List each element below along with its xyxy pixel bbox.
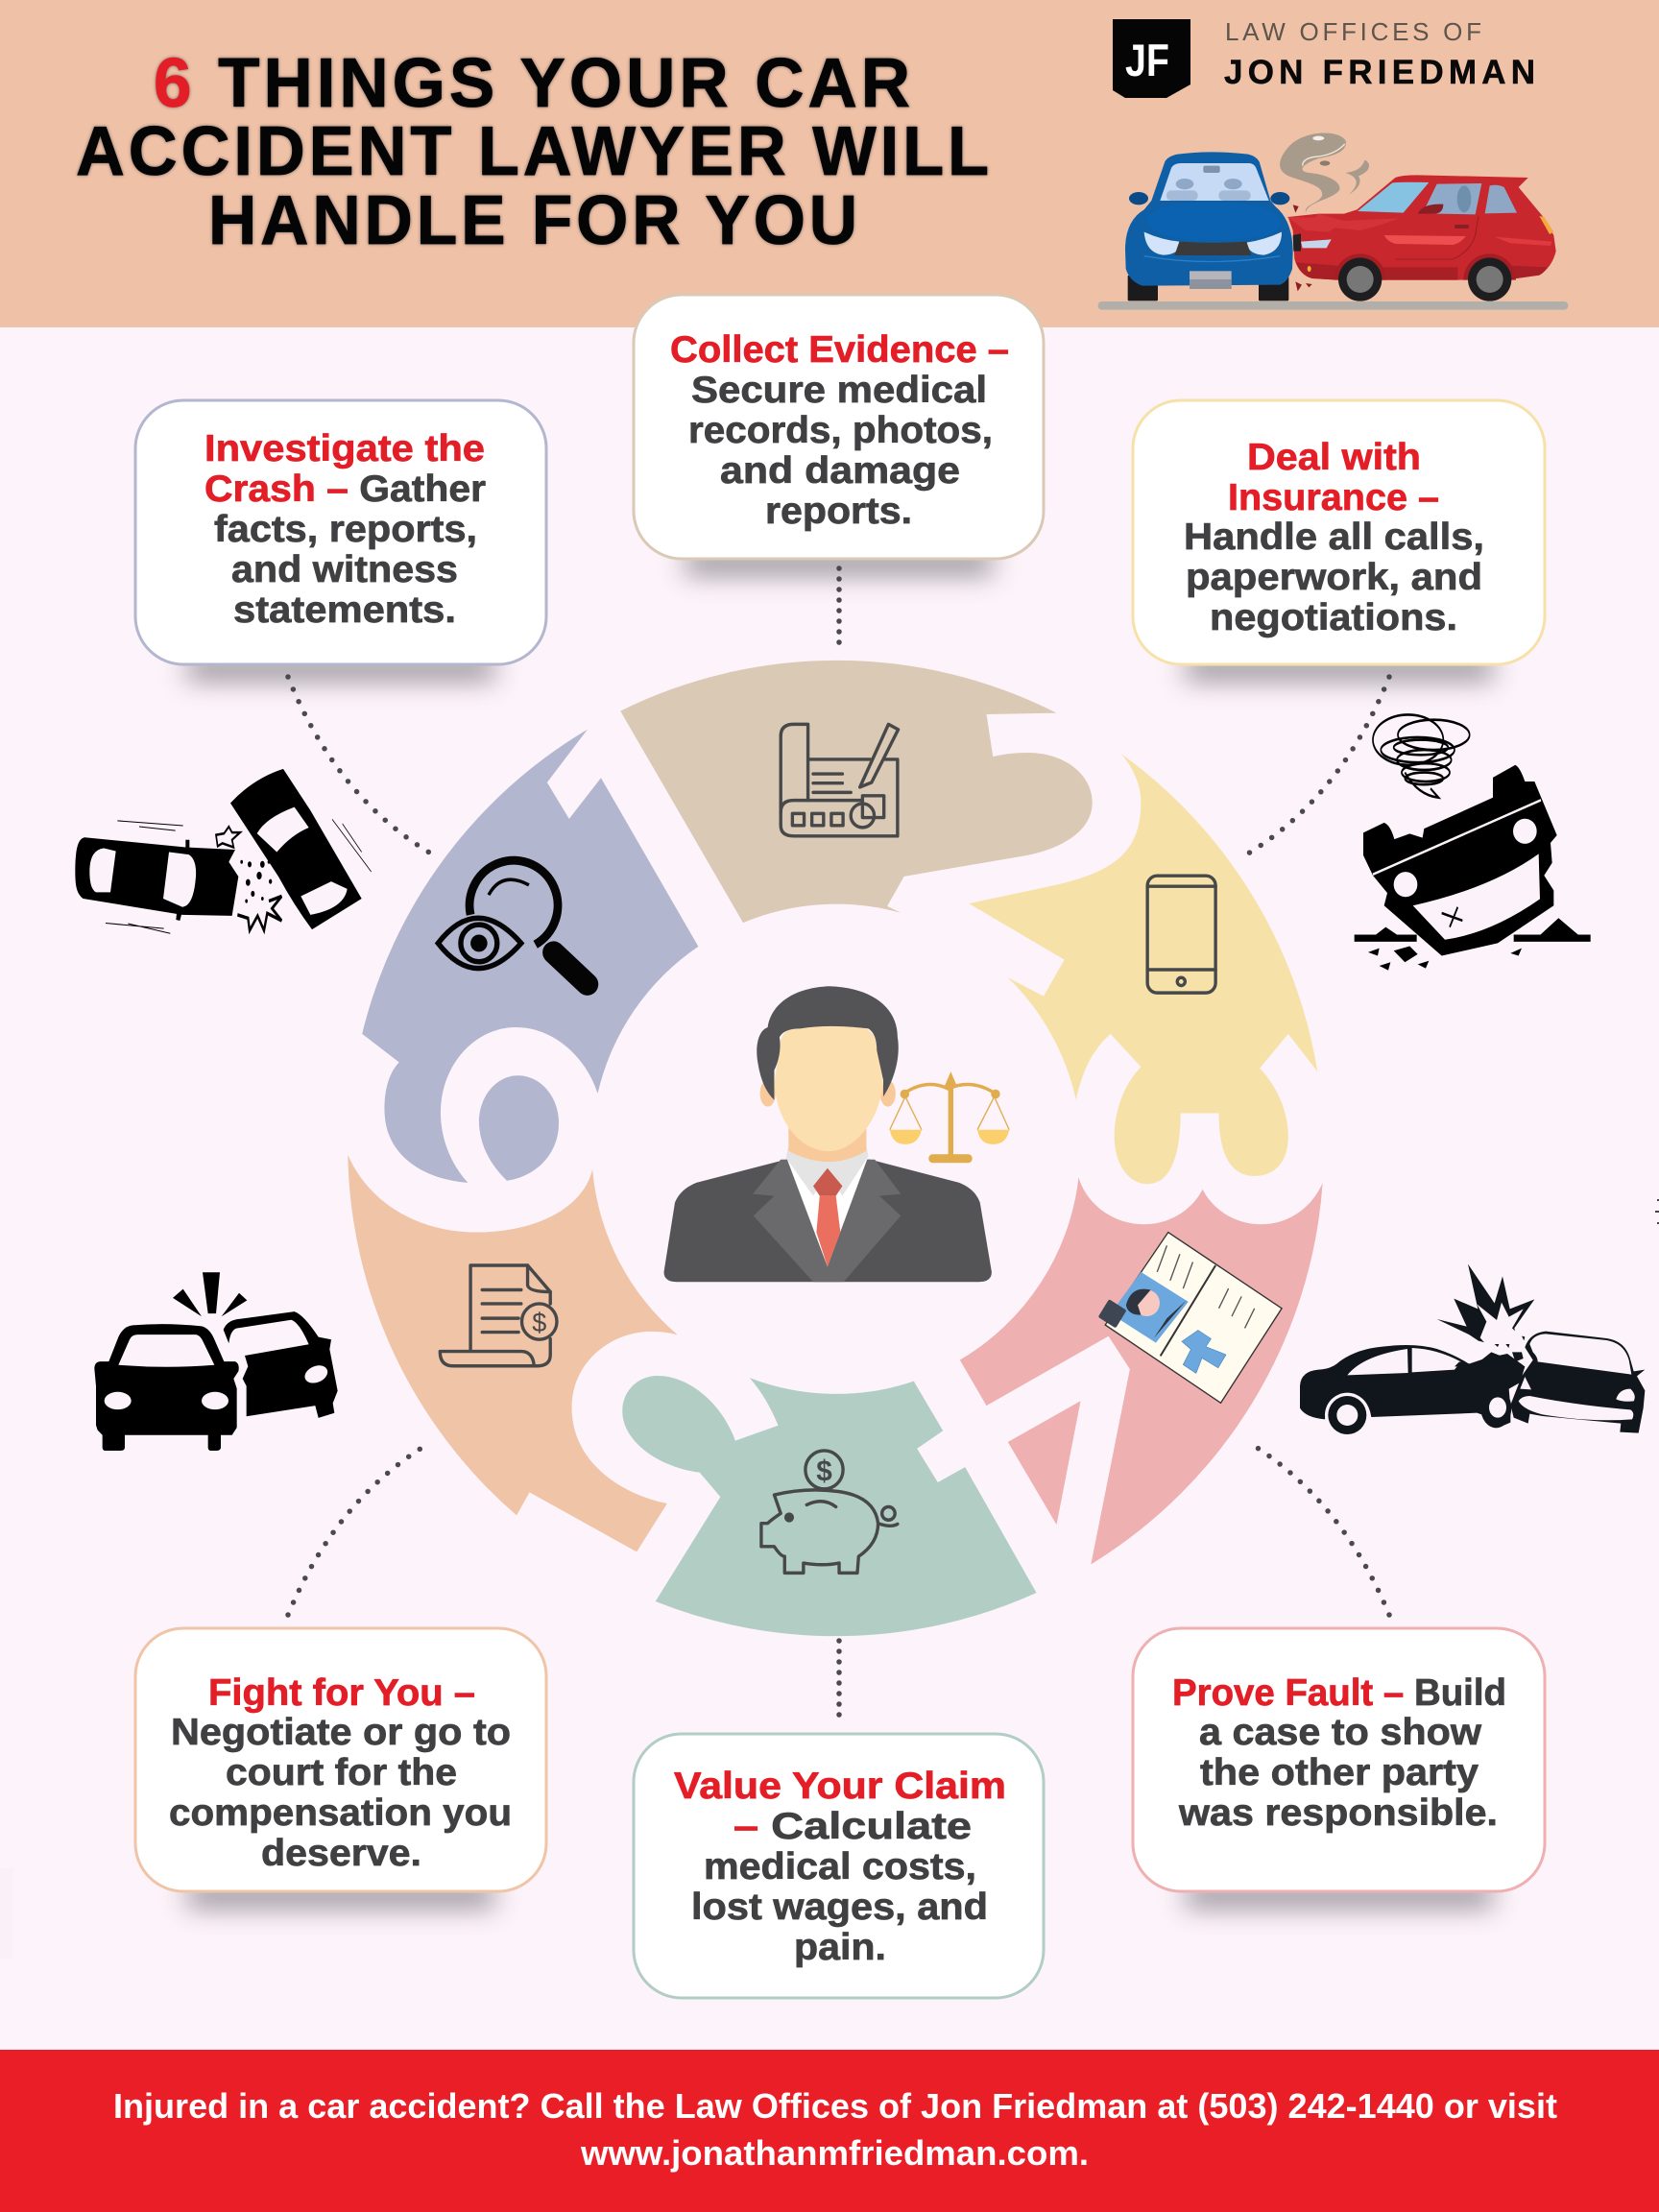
segment: value your claim [622,1376,1037,1636]
icon: scales of justice [890,1071,1009,1163]
card text: Investigate the [204,428,485,469]
card text: deserve. [261,1833,421,1874]
central lawyer figure [664,986,1009,1282]
smoke [1280,132,1369,213]
red car [1287,175,1556,301]
card text: records, photos, [688,410,993,451]
card text [1172,1672,1506,1834]
card text: reports. [765,491,912,532]
burst [1437,1264,1534,1354]
icon: bill document [440,1265,557,1366]
title: 6 THINGS YOUR CAR [154,45,914,122]
icon: medical card [1098,1233,1282,1403]
card text: compensation you [169,1792,512,1834]
illustration: two cars bumping [94,1272,338,1451]
card text: Prove Fault – Build [1172,1672,1506,1714]
card text: the other party [1200,1752,1479,1793]
card: prove fault [1133,1628,1545,1907]
card text: was responsible. [1178,1792,1498,1834]
card text: Crash – Gather [204,469,486,510]
connector: investigate [288,677,431,854]
card: value your claim [634,1734,1044,1998]
segment: investigate the crash [362,730,698,1183]
icon: piggy bank: $ [816,1455,832,1487]
illustration: overturned car [1355,714,1591,971]
logo text: law offices of: LAW OFFICES OF [1225,17,1481,46]
card: deal with insurance [1133,400,1545,680]
card: investigate the crash [135,400,546,680]
panel: wheel of six segments [348,661,1323,1636]
card text: – Calculate [733,1806,972,1847]
header band [0,0,1659,327]
card text: Secure medical [691,370,987,411]
sedan [1300,1336,1525,1437]
card text [674,1766,1006,1968]
card text [204,428,486,631]
icon: JF shield: JF [1125,35,1169,85]
card: collect evidence [634,295,1044,574]
front car [1510,1332,1645,1433]
card text: Insurance – [1228,477,1439,518]
segment: prove fault [960,1177,1323,1564]
card text [670,329,1009,532]
logo text: Jon Friedman: JON FRIEDMAN [1224,54,1535,91]
connector: deal with insurance [1248,677,1389,854]
card text: lost wages, and [691,1887,988,1928]
card text: and damage [720,450,960,492]
card text [1184,437,1484,638]
segment: fight for you [348,1155,678,1551]
title: ACCIDENT LAWYER WILL [76,113,993,190]
card text: Collect Evidence – [670,329,1009,371]
card text: Value Your Claim [674,1766,1006,1807]
card text: pain. [794,1927,886,1968]
segment: collect evidence [620,661,1093,923]
connector: prove fault [1248,1442,1389,1615]
illustration: top-down collision [75,769,372,933]
icon: phone [1147,876,1215,993]
card text: statements. [233,589,456,631]
footer text [113,2086,1557,2173]
card text: paperwork, and [1186,557,1482,598]
title: HANDLE FOR YOU [208,182,861,259]
card text: Handle all calls, [1184,517,1484,558]
card text: Fight for You – [208,1672,475,1714]
icon: bill document: $ [532,1308,546,1337]
card text: medical costs, [704,1846,976,1887]
illustration: side impact [1300,1264,1645,1437]
footer banner [0,2050,1659,2212]
footer text: www.jonathanmfriedman.com. [580,2133,1089,2173]
card: fight for you [135,1628,546,1907]
card text: and witness [231,549,458,590]
card text: a case to show [1199,1712,1482,1753]
card text: Deal with [1247,437,1421,478]
segment: deal with insurance [969,754,1317,1184]
card text: facts, reports, [214,509,477,550]
card text: court for the [226,1752,457,1793]
icon: piggy bank [761,1451,898,1573]
card text: Negotiate or go to [171,1712,511,1753]
icon: eye and magnifier [438,860,588,984]
illustration: car crash header [1098,132,1568,310]
connector: collect evidence [836,568,842,645]
icon: blueprint and pencil [781,724,899,836]
icon: JF shield [1113,19,1190,98]
blue car [1125,152,1293,301]
footer text: Injured in a car accident? Call the Law Offices of Jon Friedman at (503) 242-1440 or visit [113,2086,1557,2126]
logo [1113,17,1535,98]
connector: fight for you [288,1442,431,1615]
title [76,45,993,259]
card text: negotiations. [1210,597,1457,638]
connector: value your claim [836,1641,842,1716]
card text [169,1672,512,1874]
